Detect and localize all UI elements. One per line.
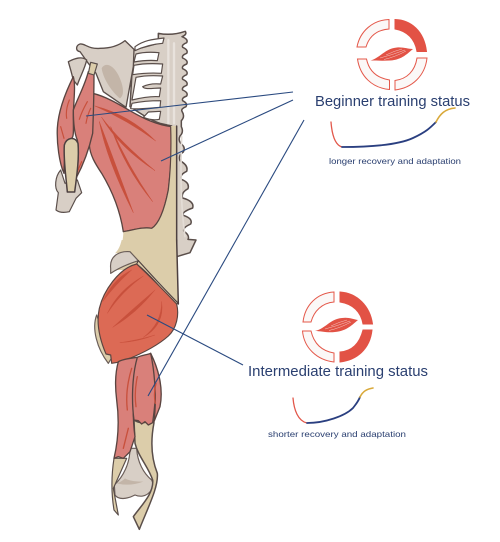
ring segment: top left [303, 292, 334, 322]
leader line: intermediate to glute [147, 315, 243, 365]
arm: forearm muscle [57, 72, 94, 178]
caption: intermediate: shorter recovery and adaptation [268, 429, 406, 439]
leader line: beginner to back [161, 100, 293, 161]
tan tendon plate [64, 138, 78, 192]
upper arm bone [68, 58, 87, 85]
pelvis tan strip [112, 126, 177, 270]
anatomy: hip and leg [95, 240, 178, 529]
caption: beginner: longer recovery and adaptation [329, 156, 461, 166]
leader line: beginner to hamstring [148, 120, 304, 396]
heading: intermediate: Intermediate training status [248, 363, 428, 380]
hip tan region [115, 240, 178, 303]
forearm bones [56, 170, 82, 212]
shoulder blade [77, 41, 134, 107]
ring segment: bottom left [302, 331, 334, 362]
ring segment: bottom right [395, 58, 427, 90]
shoulder blade shading [102, 65, 123, 98]
ring segment: bottom right filled [340, 330, 372, 362]
ring segment: bottom left [358, 59, 390, 90]
gluteal tan band [95, 315, 113, 363]
heading: beginner: Beginner training status [315, 93, 470, 110]
tendon [88, 62, 97, 75]
femur bone [114, 448, 153, 499]
curve: beginner recovery [331, 108, 455, 147]
gluteus maximus muscle [98, 264, 178, 363]
hamstring muscles [114, 353, 161, 458]
ring segment: top right filled [395, 20, 426, 52]
ring segment: top left [357, 20, 389, 47]
icon: muscle [315, 318, 358, 332]
latissimus muscle [89, 93, 172, 232]
icon: beginner ring [357, 20, 427, 90]
spine and ribs [130, 31, 196, 257]
icon: intermediate ring [302, 292, 372, 362]
hip bone [111, 252, 138, 273]
hip edge [177, 240, 178, 304]
ring segment: top right filled [340, 292, 372, 324]
tendons [133, 419, 157, 529]
leader line: beginner to arm [86, 92, 293, 116]
anatomy: upper body [56, 31, 196, 270]
curve: intermediate recovery [293, 388, 373, 423]
icon: muscle [370, 47, 413, 61]
